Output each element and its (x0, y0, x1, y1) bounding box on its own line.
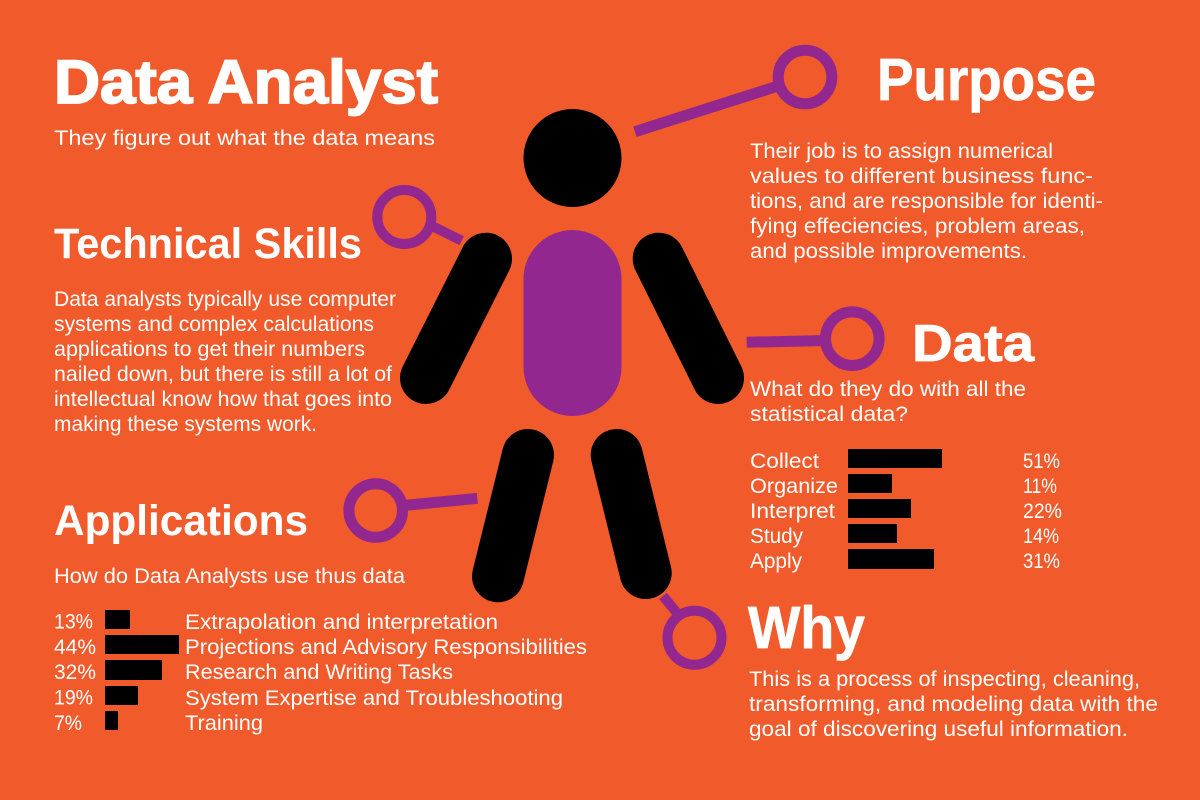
row: system expertise: 19% (54, 686, 93, 710)
text: applications intro: How do Data Analysts use thus data (54, 565, 405, 588)
row: organize (750, 474, 1057, 498)
bar chart: data (750, 449, 1062, 573)
row: research: 32% (54, 661, 96, 684)
bar chart: applications (54, 610, 587, 735)
row: collect (750, 449, 1060, 473)
row: training (54, 711, 263, 735)
callout pin: purpose (635, 50, 832, 132)
text: data (750, 378, 1026, 426)
text: why (749, 668, 1158, 741)
heading: data: Data (912, 315, 1035, 373)
figure right arm (659, 259, 718, 378)
text: technical skills (54, 288, 396, 436)
row: interpret: Interpret (750, 500, 835, 523)
text: technical skills: Data analysts typically use computer (54, 288, 396, 311)
text: purpose: and possible improvements. (750, 240, 1027, 263)
row: study: 14% (1023, 525, 1059, 548)
callout pin: data (747, 312, 879, 366)
heading: technical skills: Technical Skills (54, 220, 362, 268)
callout pin: why (663, 596, 722, 665)
row: apply (750, 549, 1060, 573)
text: technical skills: applications to get their numbers (54, 338, 365, 361)
text: purpose: tions, and are responsible for identi- (750, 190, 1103, 213)
row: organize: Organize (750, 475, 838, 498)
row: apply: 31% (1023, 550, 1060, 573)
row: extrapolation: 13% (54, 610, 93, 634)
text: technical skills: systems and complex calculations (54, 313, 374, 336)
text: why: This is a process of inspecting, cleaning, (749, 668, 1140, 691)
row: apply: Apply (750, 550, 802, 573)
text: technical skills: nailed down, but there is still a lot of (54, 363, 392, 386)
text: data: What do they do with all the (750, 378, 1026, 401)
text: purpose (750, 140, 1103, 263)
text: purpose: fying effeciencies, problem areas, (750, 215, 1085, 238)
row: interpret: 22% (1023, 500, 1062, 523)
row: system expertise: System Expertise and Troubleshooting (185, 687, 563, 710)
subtitle: They figure out what the data means (54, 127, 435, 150)
row: collect: Collect (750, 450, 819, 473)
row: interpret (750, 499, 1062, 523)
heading: purpose: Purpose (877, 47, 1096, 113)
text: purpose: values to different business func- (750, 165, 1093, 188)
row: study (750, 524, 1059, 548)
text: technical skills: intellectual know how that goes into (54, 388, 392, 411)
figure head (524, 109, 622, 207)
row: projections: Projections and Advisory Responsibilities (185, 636, 587, 659)
callout pin: applications (349, 484, 477, 537)
title: Data Analyst (54, 48, 438, 116)
text: why: transforming, and modeling data with the (749, 693, 1158, 716)
heading: why: Why (748, 595, 865, 661)
row: collect: 51% (1023, 450, 1060, 473)
text: purpose: Their job is to assign numerical (750, 140, 1053, 163)
row: study: Study (750, 525, 803, 548)
text: data: statistical data? (750, 403, 908, 426)
row: projections: 44% (54, 636, 96, 659)
row: training: 7% (54, 712, 82, 735)
figure torso (524, 230, 622, 416)
figure right leg (617, 455, 646, 573)
human figure (426, 109, 718, 576)
row: extrapolation (54, 610, 498, 634)
figure left arm (426, 259, 486, 378)
text: why: goal of discovering useful information. (749, 718, 1128, 741)
text: technical skills: making these systems work. (54, 413, 317, 436)
row: extrapolation: Extrapolation and interpretation (185, 611, 498, 634)
row: research (54, 660, 453, 684)
row: system expertise (54, 686, 563, 710)
row: training: Training (185, 712, 263, 735)
callout pin: technical skills (377, 190, 462, 244)
figure left leg (498, 455, 528, 576)
heading: applications: Applications (54, 497, 308, 545)
row: research: Research and Writing Tasks (185, 661, 453, 684)
row: projections (54, 635, 587, 659)
row: organize: 11% (1023, 475, 1057, 498)
